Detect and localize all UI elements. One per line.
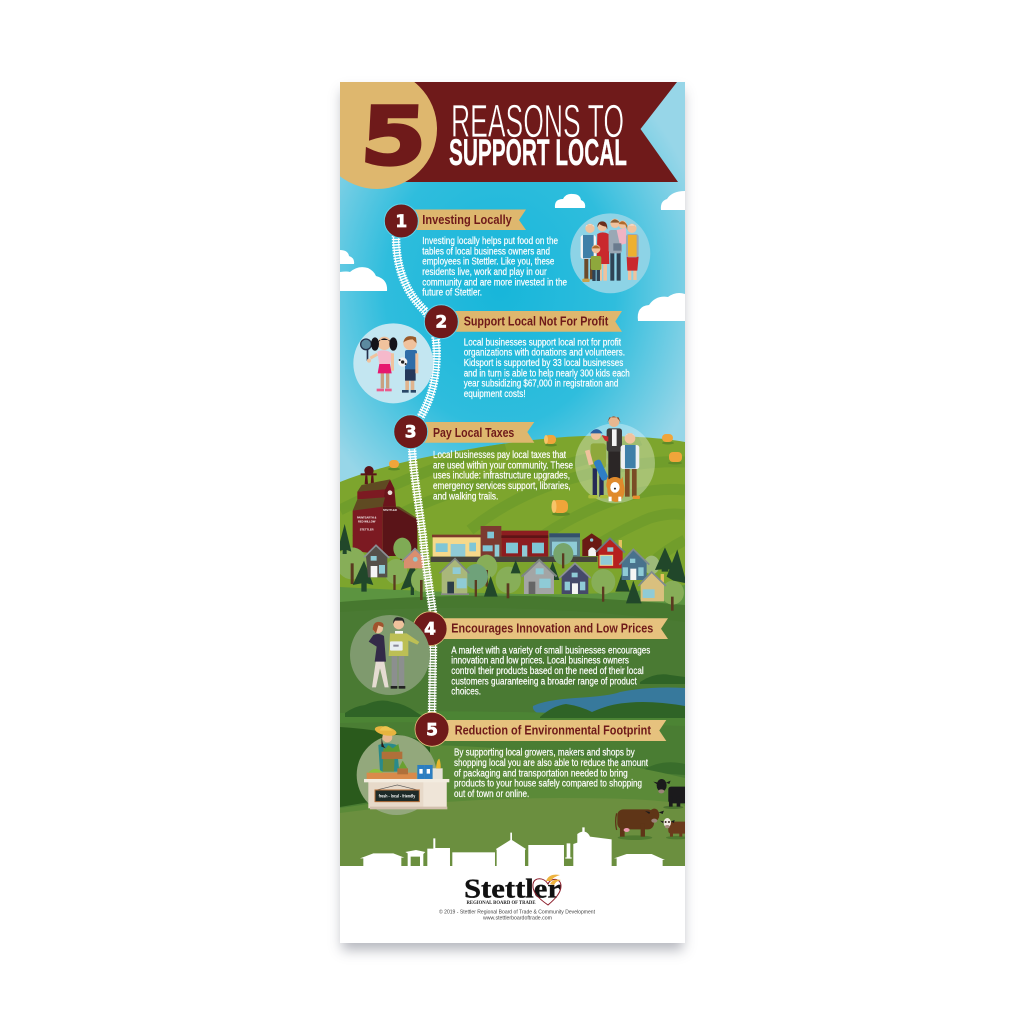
panel: reason 4: [350, 612, 668, 698]
grain elevator: STETTLER: [360, 528, 374, 532]
footer logo: Stettler: [464, 872, 561, 904]
houses: [364, 538, 666, 601]
gold number circle: [340, 82, 437, 189]
text block 3: emergency services support, libraries,: [433, 481, 571, 492]
text block 2: year subsidizing $67,000 in registration and: [464, 379, 618, 390]
grain elevator: STETTLER: [383, 508, 397, 512]
badge 1: [384, 204, 418, 238]
text block 5: out of town or online.: [454, 789, 529, 800]
panel: reason 2: [353, 305, 630, 403]
heading 2: Support Local Not For Profit: [464, 313, 609, 328]
text block 4: customers guaranteeing a broader range of product: [451, 676, 637, 687]
lower green land: [340, 585, 685, 605]
text block 5: [454, 748, 648, 800]
big number 5: 5: [358, 90, 429, 183]
grain elevator: RED WILLOW: [358, 519, 376, 523]
text block 1: [422, 236, 567, 299]
ribbon 2: [450, 311, 622, 332]
brown cow: [616, 809, 664, 840]
panel: reason 5: [357, 712, 666, 815]
sky background: [340, 82, 685, 502]
text block 4: innovation and low prices. Local business owners: [451, 656, 629, 667]
text block 3: are used within your community. These: [433, 460, 573, 471]
badge 3: [394, 415, 428, 449]
text block 3: and walking trails.: [433, 491, 498, 502]
text block 5: products to your house safely compared to shopping: [454, 779, 642, 790]
text block 2: [464, 337, 630, 400]
text block 1: Investing locally helps put food on the: [422, 236, 558, 247]
badge 2: 2: [435, 313, 447, 333]
badge 5: [415, 712, 449, 746]
town skyline silhouette: [360, 827, 665, 867]
icon: heart and wheat: [533, 875, 561, 905]
text block 2: and in turn is able to help nearly 300 kids each: [464, 368, 630, 379]
grain elevator: PAINTEARTH &: [357, 516, 377, 520]
black cow: [653, 779, 688, 809]
green hills: [340, 436, 685, 610]
cows: [653, 779, 688, 809]
business people illustration: [350, 615, 430, 695]
dark forest slope: [340, 727, 440, 807]
text block 5: shopping local you are also able to reduce the amount: [454, 758, 648, 769]
panel: reason 1: [384, 204, 650, 299]
text block 4: control their products based on the need of their local: [451, 666, 644, 677]
market stall illustration: fresh - local - friendly: [379, 793, 416, 798]
calf: [660, 818, 685, 840]
text block 1: employees in Stettler. Like you, these: [422, 257, 555, 268]
text block 3: uses include: infrastructure upgrades,: [433, 471, 570, 482]
title line two: SUPPORT LOCAL: [449, 131, 627, 173]
text block 4: [451, 645, 650, 698]
lake: [533, 688, 685, 714]
hay bales: [388, 434, 682, 516]
text block 1: tables of local business owners and: [422, 246, 550, 257]
footer panel: [340, 866, 685, 943]
badge 2: [424, 305, 458, 339]
title line one: REASONS TO: [451, 95, 624, 147]
heading 3: Pay Local Taxes: [433, 425, 514, 440]
ribbon 3: [420, 422, 534, 443]
badge 4: [413, 612, 447, 646]
lower field: [340, 712, 685, 726]
text block 3: Local businesses pay local taxes that: [433, 450, 566, 461]
text block 2: Kidsport is supported by 33 local businesses: [464, 358, 623, 369]
heading 1: Investing Locally: [422, 212, 513, 227]
kids illustration: [353, 323, 433, 403]
badge 4: 4: [424, 620, 436, 640]
family illustration: [570, 213, 650, 293]
town: [336, 524, 687, 611]
ribbon 1: [412, 210, 526, 230]
text block 2: Local businesses support local not for profit: [464, 337, 621, 348]
text block 1: future of Stettler.: [422, 288, 482, 299]
text block 5: of packaging and transportation needed to bring: [454, 768, 628, 779]
badge 5: 5: [426, 720, 438, 740]
footer logo: REGIONAL BOARD OF TRADE: [466, 901, 536, 906]
text block 3: [433, 450, 573, 502]
text block 4: A market with a variety of small businesses encourages: [451, 645, 650, 656]
clouds: [340, 191, 685, 321]
text block 1: residents live, work and play in our: [422, 267, 547, 278]
text block 4: choices.: [451, 687, 481, 698]
heading 5: Reduction of Environmental Footprint: [455, 722, 652, 737]
panel: reason 3: [394, 415, 655, 503]
rail track: [394, 236, 439, 716]
market stall illustration: [357, 724, 449, 815]
badge 1: 1: [395, 212, 407, 232]
bushes: [345, 674, 685, 775]
website text: www.stettlerboardoftrade.com: [483, 916, 553, 922]
ribbon 4: [440, 618, 668, 639]
group illustration: [575, 416, 655, 503]
heading 4: Encourages Innovation and Low Prices: [451, 621, 653, 636]
text block 2: equipment costs!: [464, 389, 526, 400]
copyright text: © 2019 - Stettler Regional Board of Trade & Community Development: [439, 908, 595, 916]
ribbon 5: [442, 720, 666, 741]
badge 3: 3: [405, 423, 417, 443]
text block 5: By supporting local growers, makers and shops by: [454, 748, 635, 759]
background trees: [336, 524, 687, 611]
text block 1: community and are more invested in the: [422, 277, 567, 288]
field stripes: [340, 440, 685, 565]
text block 2: organizations with donations and volunteers.: [464, 348, 625, 359]
title banner: [400, 82, 678, 182]
grain elevator: [353, 466, 417, 556]
storefront row: [431, 526, 602, 562]
